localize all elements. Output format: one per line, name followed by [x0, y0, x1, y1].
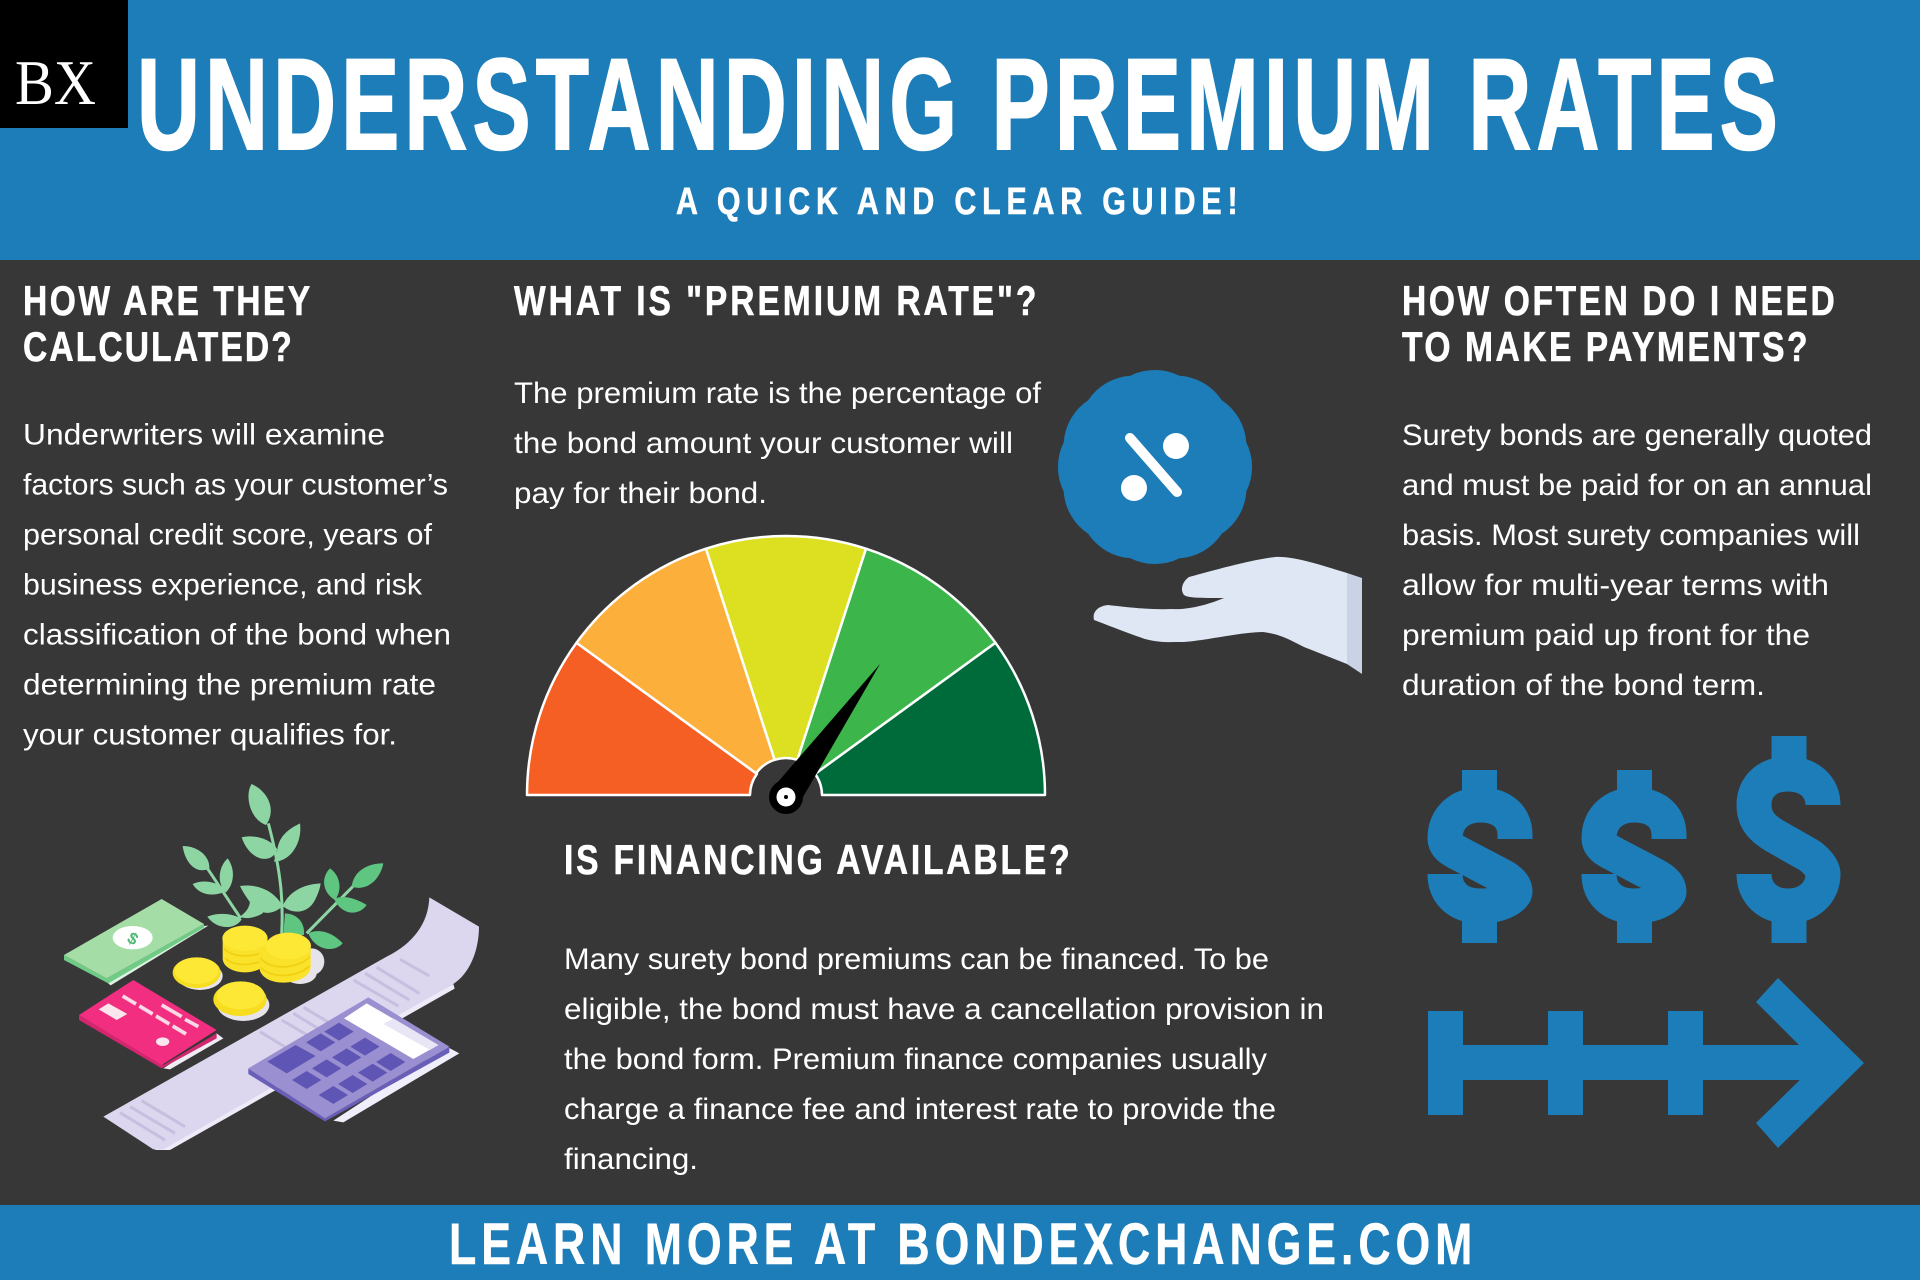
icon: percent badge [1058, 370, 1252, 564]
heading: how often payments: TO MAKE PAYMENTS? [1402, 325, 1808, 371]
text block: payment frequency: allow for multi-year terms with [1402, 569, 1829, 602]
panel: how are they calculated [23, 279, 479, 1150]
credit card [79, 980, 223, 1069]
text block: premium rate definition: pay for their bond. [514, 477, 767, 510]
text block: calculation factors [23, 418, 451, 752]
logo: BX: BX [15, 48, 96, 118]
title: UNDERSTANDING PREMIUM RATES [137, 33, 1778, 177]
text block: calculation factors: your customer qualifies for. [23, 718, 397, 752]
arrow: payment timeline [1428, 978, 1864, 1148]
banknote [64, 899, 208, 985]
icon: dollar sign 1 [1445, 770, 1515, 943]
text block: financing: charge a finance fee and interest rate to provide the [564, 1093, 1276, 1126]
heading: how often payments [1402, 279, 1835, 371]
gauge segment: yellow [706, 536, 866, 760]
plant [183, 784, 383, 949]
text block: financing: financing. [564, 1143, 698, 1176]
text block: payment frequency: and must be paid for on an annual [1402, 469, 1872, 502]
panel: what is premium rate [514, 279, 1362, 814]
text block: payment frequency: Surety bonds are generally quoted [1402, 419, 1872, 452]
gauge segment: dark green [815, 643, 1045, 795]
banknote: $ [124, 928, 142, 950]
text block: calculation factors: business experience, and risk [23, 568, 423, 602]
receipt [103, 897, 479, 1150]
panel: is financing available [564, 838, 1324, 1176]
subtitle: A QUICK AND CLEAR GUIDE! [676, 181, 1238, 223]
gauge segment: green [797, 549, 996, 773]
gauge segment: orange [576, 549, 775, 773]
panel: how often payments [1402, 279, 1872, 1148]
text block: premium rate definition: the bond amount your customer will [514, 427, 1013, 460]
gauge needle [769, 664, 880, 814]
text block: payment frequency: basis. Most surety companies will [1402, 519, 1860, 552]
text block: calculation factors: factors such as your customer’s [23, 468, 448, 502]
illustration: money, coins, plant, calculator [64, 784, 479, 1150]
text block: premium rate definition: The premium rate is the percentage of [514, 377, 1042, 410]
text block: financing: eligible, the bond must have a cancellation provision in [564, 993, 1324, 1026]
text block: calculation factors: personal credit score, years of [23, 518, 433, 552]
text block: payment frequency [1402, 419, 1872, 702]
gauge segment: red [527, 643, 757, 795]
icon: dollar sign 3 [1754, 736, 1823, 943]
calculator [248, 997, 459, 1122]
heading: how are they calculated [23, 279, 310, 371]
text block: financing: Many surety bond premiums can be financed. To be [564, 943, 1269, 976]
text block: financing: the bond form. Premium finance companies usually [564, 1043, 1267, 1076]
heading: how are they calculated: CALCULATED? [23, 325, 292, 371]
text block: calculation factors: Underwriters will examine [23, 418, 385, 452]
heading: how are they calculated: HOW ARE THEY [23, 279, 310, 325]
heading: what is premium rate: WHAT IS "PREMIUM RATE"? [514, 279, 1036, 325]
logo: BX [0, 0, 128, 128]
icon: dollar sign 2 [1599, 770, 1669, 943]
gauge chart [527, 536, 1045, 814]
footer band [0, 1205, 1920, 1280]
text block: calculation factors: determining the premium rate [23, 668, 436, 702]
text block: payment frequency: premium paid up front for the [1402, 619, 1810, 652]
icon: open hand [1094, 557, 1362, 674]
text block: premium rate definition [514, 377, 1042, 510]
footer call to action: LEARN MORE AT BONDEXCHANGE.COM [449, 1211, 1472, 1276]
text block: financing [564, 943, 1324, 1176]
heading: how often payments: HOW OFTEN DO I NEED [1402, 279, 1835, 325]
header band [0, 0, 1920, 260]
text block: calculation factors: classification of the bond when [23, 618, 451, 652]
coins [173, 926, 324, 1021]
text block: payment frequency: duration of the bond term. [1402, 669, 1765, 702]
heading: is financing available: IS FINANCING AVAILABLE? [564, 838, 1070, 884]
